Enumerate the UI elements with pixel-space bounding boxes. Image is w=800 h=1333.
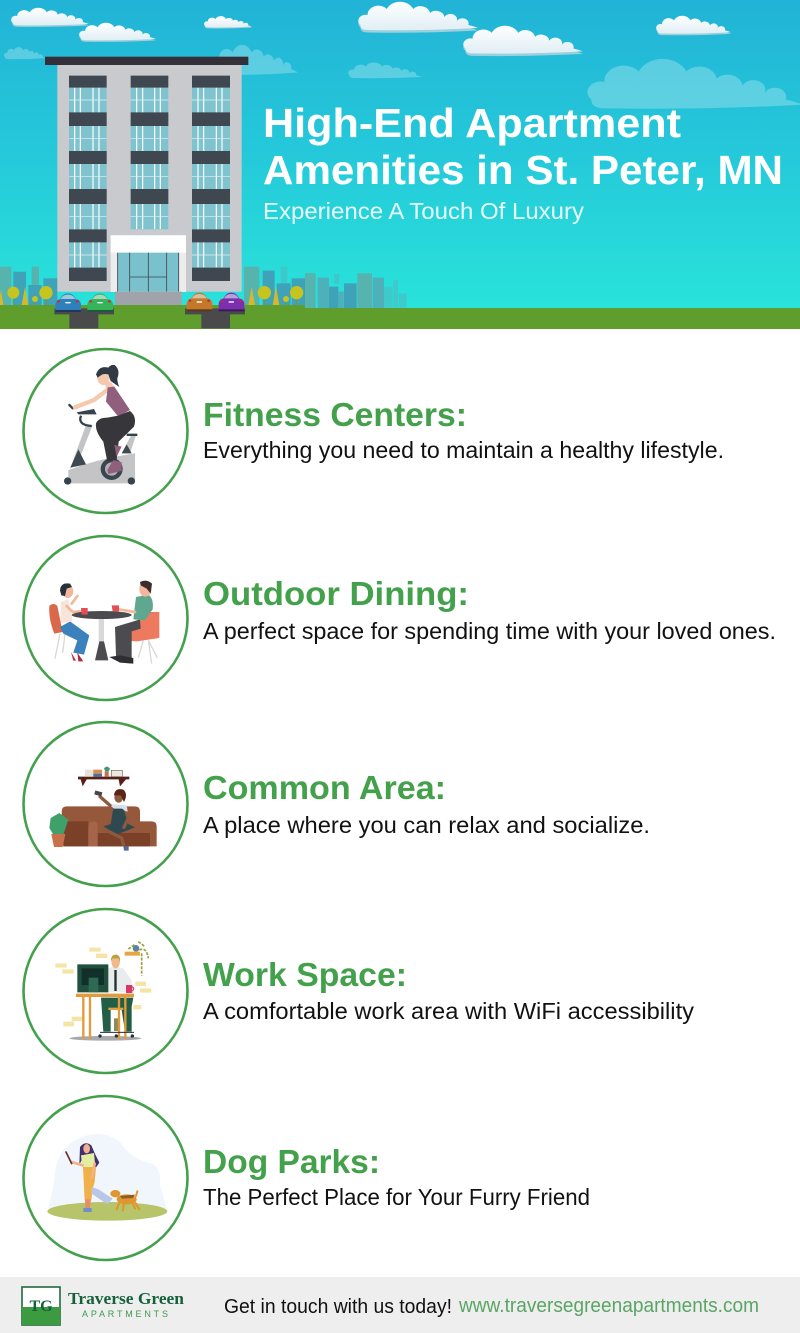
description: A place where you can relax and socialize. <box>203 812 650 838</box>
subtitle: Experience A Touch Of Luxury <box>263 198 584 224</box>
building walls <box>57 65 242 292</box>
panel: header banner <box>0 0 800 329</box>
icon: woman on exercise bike <box>24 349 188 513</box>
logo wordmark: Traverse Green <box>68 1289 185 1308</box>
trees <box>0 286 303 305</box>
heading: Dog Parks: <box>203 1143 380 1180</box>
title: Amenities in St. Peter, MN <box>263 147 783 193</box>
skyline <box>0 267 407 308</box>
entrance <box>111 235 186 305</box>
illustration: apartment building <box>45 57 248 328</box>
heading: Common Area: <box>203 769 446 806</box>
title: High-End Apartment <box>263 100 681 146</box>
icon: two people at a table <box>24 536 188 700</box>
sky <box>0 0 800 310</box>
white clouds <box>11 2 731 56</box>
heading: Outdoor Dining: <box>203 575 469 612</box>
icon: man at a desk <box>24 909 188 1073</box>
website url: www.traversegreenapartments.com <box>458 1295 759 1317</box>
driveways <box>54 308 245 328</box>
description: The Perfect Place for Your Furry Friend <box>203 1184 590 1210</box>
panel: footer <box>0 1277 800 1333</box>
grass <box>0 305 800 329</box>
logo mark: TG <box>29 1298 53 1315</box>
description: Everything you need to maintain a healthy lifestyle. <box>203 437 724 463</box>
logo wordmark <box>68 1289 185 1319</box>
cars <box>55 293 244 312</box>
icon: woman on a sofa <box>24 722 188 886</box>
description: A comfortable work area with WiFi accessibility <box>203 998 694 1024</box>
description: A perfect space for spending time with your loved ones. <box>203 618 776 644</box>
panel: common area <box>24 722 650 886</box>
logo mark <box>22 1287 60 1325</box>
footer background <box>0 1277 800 1333</box>
panel: work space <box>24 909 694 1073</box>
window columns <box>69 76 230 281</box>
faint background clouds <box>4 45 800 109</box>
icon: woman walking a dog <box>24 1096 188 1260</box>
panel: dog parks <box>24 1096 590 1260</box>
panel: outdoor dining <box>24 536 776 700</box>
roof <box>45 57 248 65</box>
heading: Work Space: <box>203 956 407 993</box>
call to action: Get in touch with us today! <box>224 1296 452 1318</box>
panel: fitness centers <box>24 349 724 513</box>
heading: Fitness Centers: <box>203 396 467 433</box>
logo wordmark: APARTMENTS <box>82 1309 168 1319</box>
